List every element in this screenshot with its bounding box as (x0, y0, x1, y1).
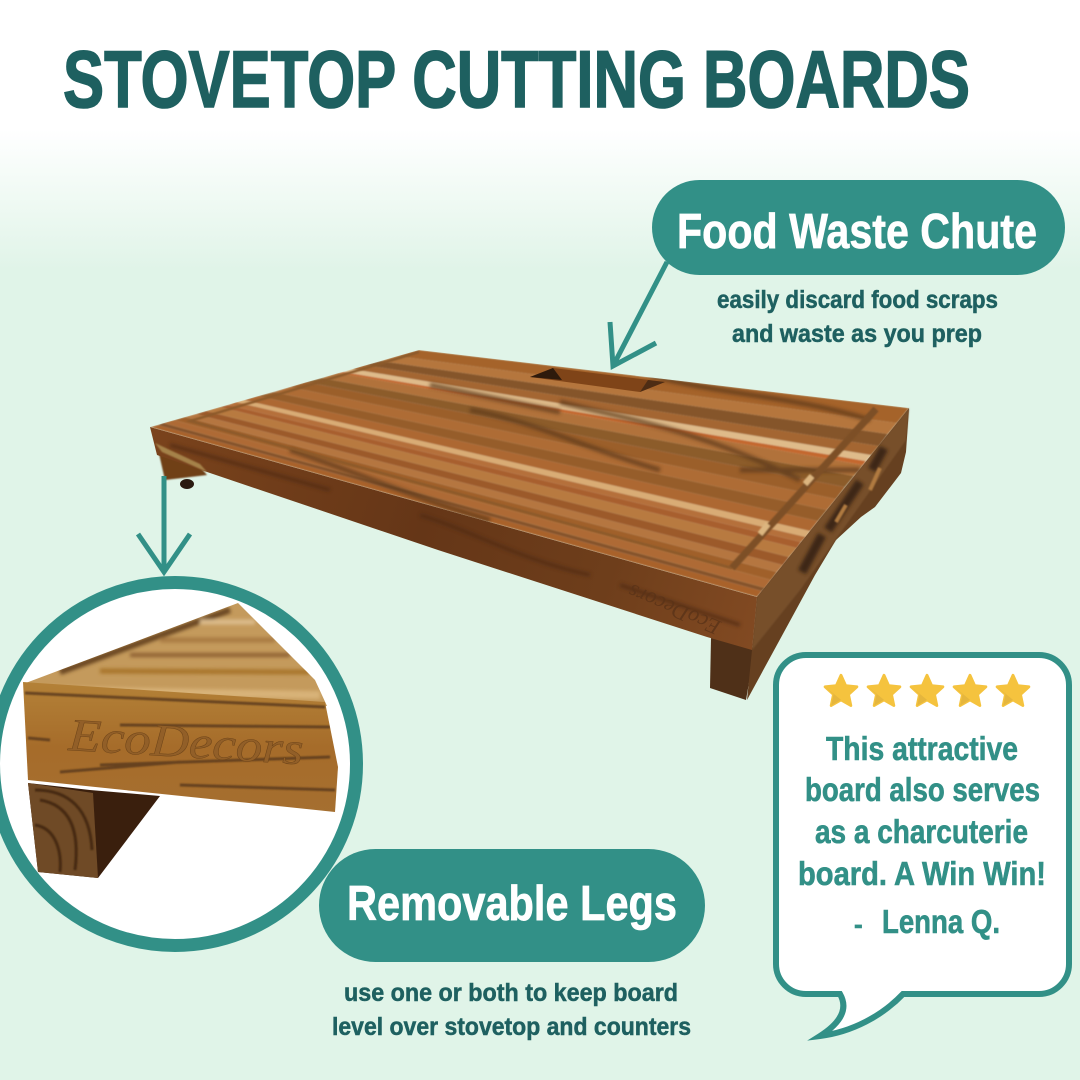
front face: EcoDecors (624, 579, 725, 641)
review quote text: board. A Win Win! (798, 855, 1046, 892)
caption: removable legs (332, 979, 691, 1041)
wood grain streaks (290, 375, 870, 520)
inset board top (20, 600, 330, 710)
caption: removable legs: use one or both to keep board (344, 979, 678, 1007)
review quote text: board also serves (805, 771, 1040, 808)
review speech bubble (776, 655, 1069, 1036)
right side of board (747, 408, 909, 700)
main product: teak cutting board (150, 350, 909, 700)
front face (150, 427, 757, 650)
front leg (710, 638, 755, 700)
back left leg (157, 445, 207, 489)
inset: leg and board close-up (20, 600, 338, 878)
review attribution: Lenna Q. (882, 903, 1000, 940)
caption: food waste chute (717, 286, 998, 348)
callout pill: removable legs: Removable Legs (347, 877, 677, 931)
review attribution (854, 903, 1000, 940)
inset logo text: EcoDecors (66, 709, 305, 774)
inset leg (28, 783, 160, 878)
juice groove (190, 352, 876, 568)
review quote text (798, 730, 1046, 892)
arrow to chute (610, 262, 667, 366)
food waste chute slot (530, 368, 665, 392)
callout pill: food waste chute (652, 180, 1065, 275)
review quote text: as a charcuterie (815, 813, 1028, 850)
inset board front face (23, 682, 338, 812)
top face with wood stripes (150, 350, 909, 597)
caption: food waste chute: easily discard food scraps (717, 286, 998, 314)
five star rating (825, 675, 1029, 706)
arrow to legs (138, 476, 190, 572)
circular detail inset (0, 582, 356, 946)
caption: food waste chute: and waste as you prep (732, 320, 982, 348)
caption: removable legs: level over stovetop and counters (332, 1013, 691, 1041)
review attribution: - (854, 909, 863, 939)
review quote text: This attractive (826, 730, 1018, 767)
callout pill: removable legs (319, 849, 705, 962)
